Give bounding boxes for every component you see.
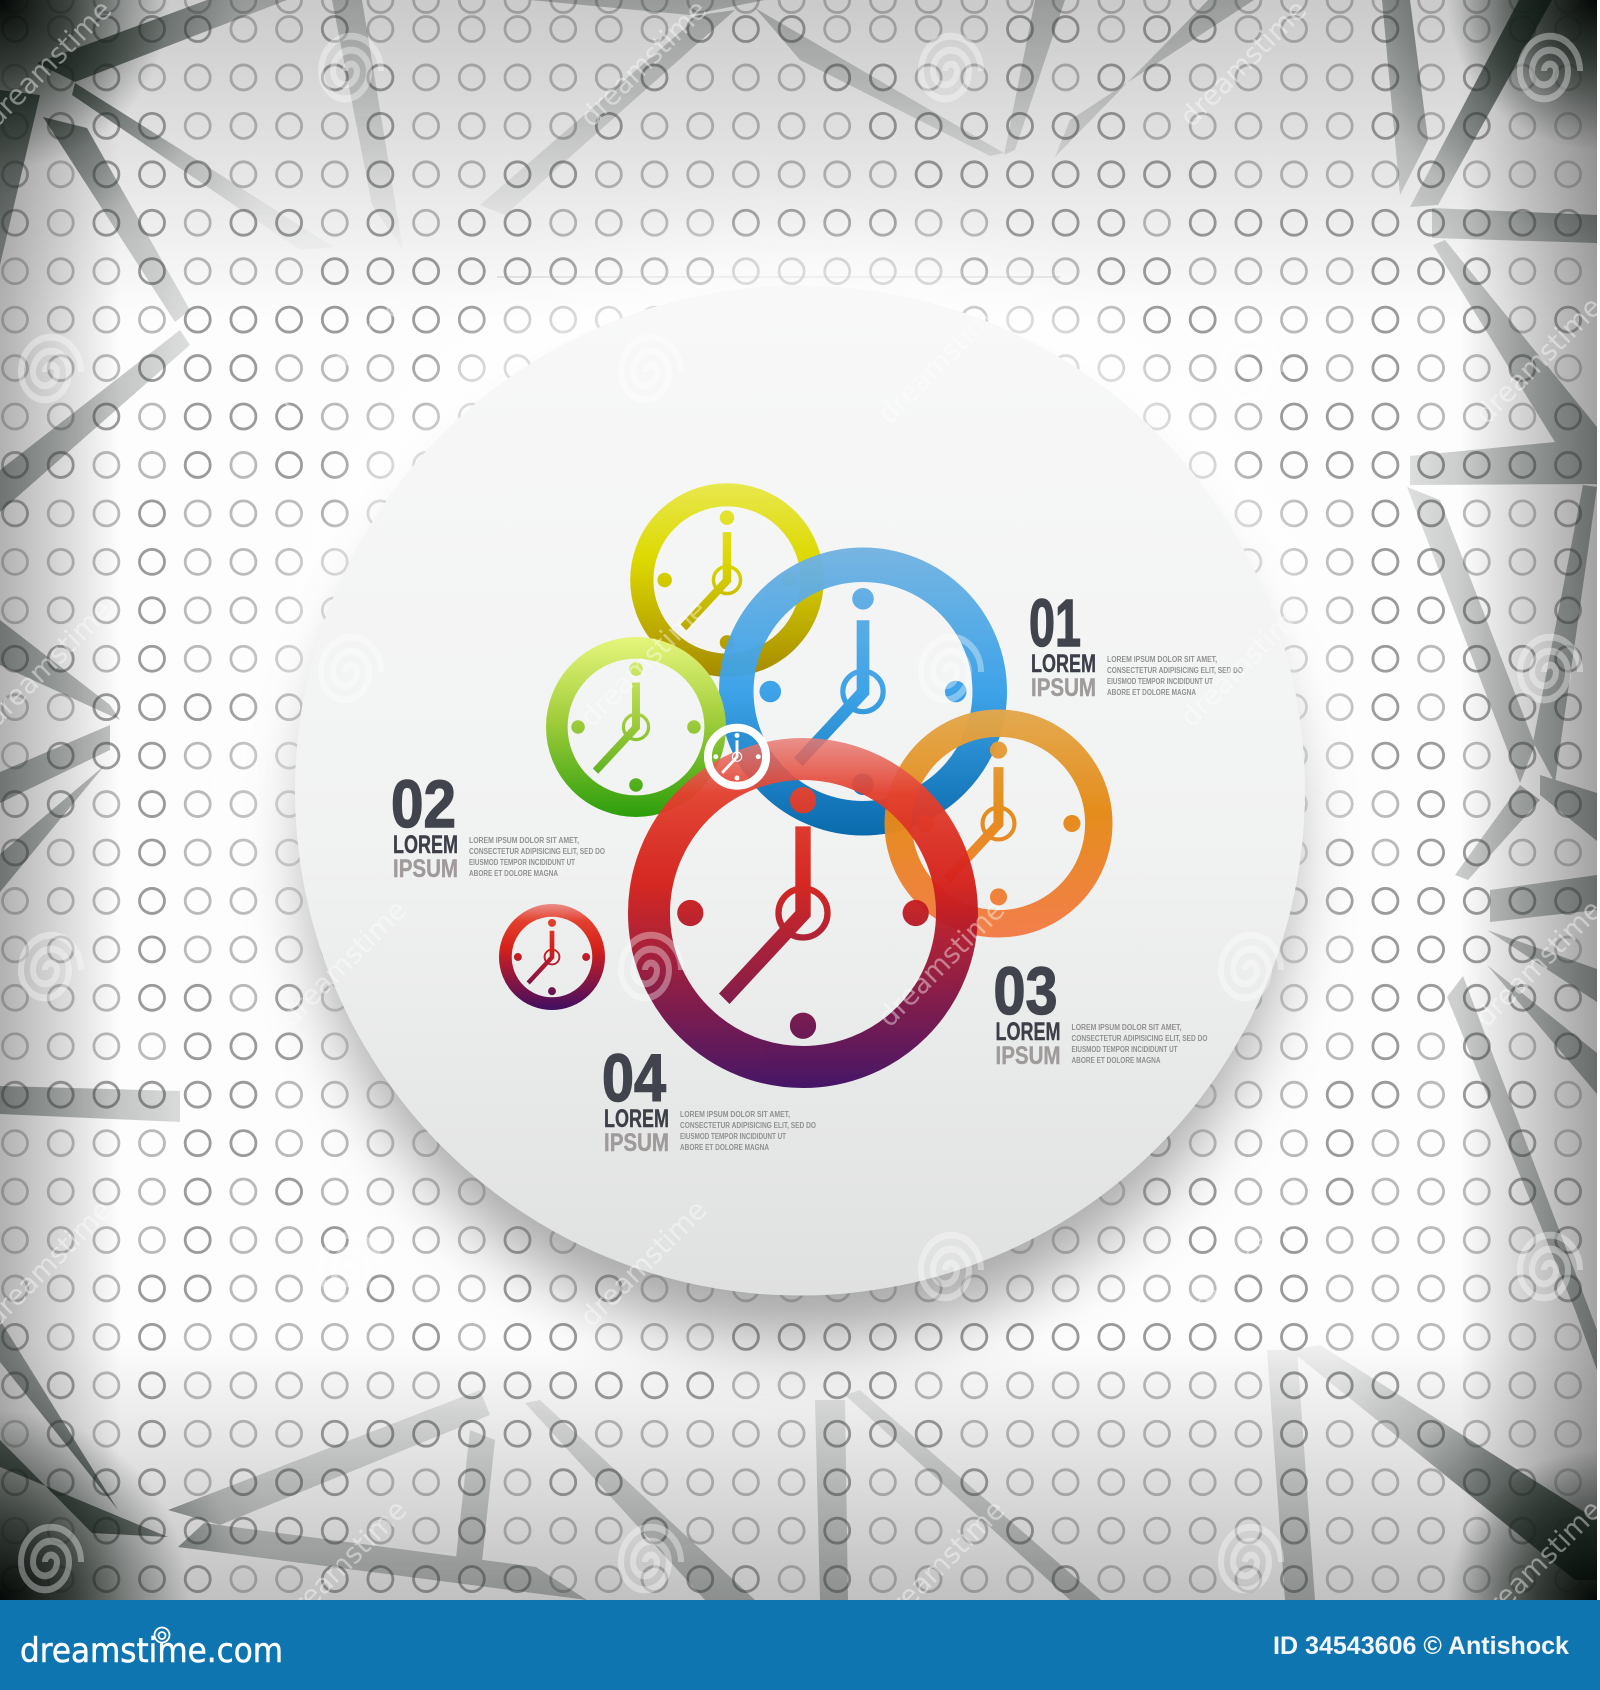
label 04: LOREM IPSUM DOLOR SIT AMET, bbox=[680, 1110, 790, 1119]
icon: footer spiral bbox=[154, 1628, 170, 1642]
label 03: IPSUM bbox=[996, 1042, 1060, 1070]
label 04: IPSUM bbox=[604, 1129, 669, 1157]
watermark text: dreamstime bbox=[871, 1493, 1011, 1633]
footer logo text: dreamstime.com bbox=[20, 1631, 283, 1671]
label 02: EIUSMOD TEMPOR INCIDIDUNT UT bbox=[469, 858, 575, 867]
watermark text: dreamstime bbox=[273, 893, 413, 1033]
label 03: CONSECTETUR ADIPISICING ELIT, SED DO bbox=[1072, 1034, 1208, 1043]
label 03: LOREM bbox=[996, 1018, 1060, 1046]
footer bar bbox=[0, 1600, 1600, 1690]
watermark text: dreamstime bbox=[273, 1493, 413, 1633]
clock: yellow bbox=[642, 495, 812, 665]
label 02: LOREM IPSUM DOLOR SIT AMET, bbox=[469, 836, 579, 845]
label 01: EIUSMOD TEMPOR INCIDIDUNT UT bbox=[1107, 677, 1213, 686]
watermark text: dreamstime bbox=[1173, 593, 1313, 733]
label 01: 01 bbox=[1029, 586, 1081, 661]
label 01: CONSECTETUR ADIPISICING ELIT, SED DO bbox=[1107, 666, 1243, 675]
label 04 bbox=[602, 1041, 816, 1157]
label 03 bbox=[994, 954, 1208, 1070]
watermark text: dreamstime bbox=[573, 593, 713, 733]
label 02 bbox=[391, 767, 605, 883]
clock: green bbox=[557, 648, 715, 806]
label 01: IPSUM bbox=[1031, 674, 1096, 702]
label 04: ABORE ET DOLORE MAGNA bbox=[680, 1143, 769, 1152]
label 02: ABORE ET DOLORE MAGNA bbox=[469, 869, 558, 878]
label 01: ABORE ET DOLORE MAGNA bbox=[1107, 688, 1196, 697]
label 03: 03 bbox=[994, 954, 1058, 1029]
label 02: CONSECTETUR ADIPISICING ELIT, SED DO bbox=[469, 847, 605, 856]
label 03: EIUSMOD TEMPOR INCIDIDUNT UT bbox=[1072, 1045, 1178, 1054]
watermark text: dreamstime bbox=[1173, 1193, 1313, 1333]
label 02: LOREM bbox=[393, 831, 458, 859]
clock: blue bbox=[736, 565, 990, 818]
footer image id: ID 34543606 © Antishock bbox=[1273, 1632, 1569, 1660]
panel: white disc bbox=[295, 286, 1305, 1296]
label 04: LOREM bbox=[604, 1105, 669, 1133]
label 02: 02 bbox=[391, 767, 456, 842]
label 03: ABORE ET DOLORE MAGNA bbox=[1072, 1056, 1161, 1065]
clock: tiny white bbox=[708, 728, 766, 786]
label 01: LOREM bbox=[1031, 650, 1096, 678]
watermark text: dreamstime bbox=[871, 893, 1011, 1033]
label 04: EIUSMOD TEMPOR INCIDIDUNT UT bbox=[680, 1132, 786, 1141]
clock: small red bbox=[505, 910, 599, 1004]
disc glow bbox=[265, 235, 1335, 1305]
disc shadow bbox=[310, 360, 1290, 1340]
label 01 bbox=[1029, 586, 1243, 702]
watermark text: dreamstime bbox=[871, 290, 1011, 430]
clock: orange bbox=[898, 723, 1099, 924]
label 01: LOREM IPSUM DOLOR SIT AMET, bbox=[1107, 655, 1217, 664]
label 02: IPSUM bbox=[393, 855, 458, 883]
label 04: 04 bbox=[602, 1041, 666, 1116]
watermark text: dreamstime bbox=[573, 1193, 713, 1333]
label 04: CONSECTETUR ADIPISICING ELIT, SED DO bbox=[680, 1121, 816, 1130]
label 03: LOREM IPSUM DOLOR SIT AMET, bbox=[1072, 1023, 1182, 1032]
clock: large red bbox=[649, 759, 957, 1067]
watermark text: dreamstime bbox=[270, 290, 410, 430]
